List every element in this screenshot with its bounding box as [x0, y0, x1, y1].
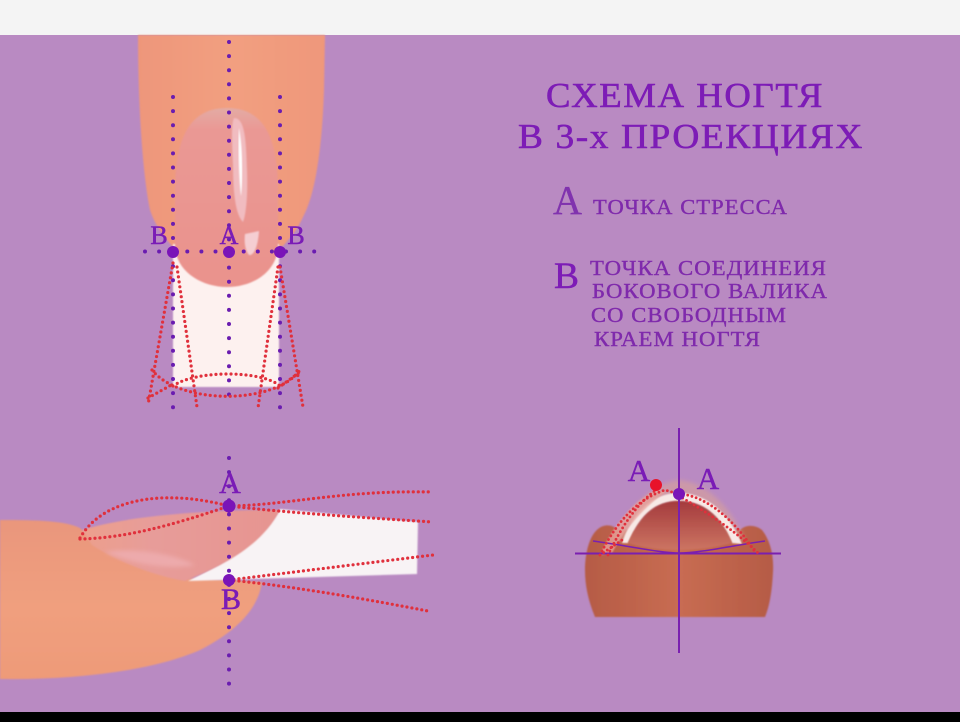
stress points: [167, 246, 286, 258]
legend: point A: ТОЧКА СТРЕССА: [593, 195, 788, 219]
finger from above: [138, 35, 325, 246]
finger under the nail: [628, 501, 732, 550]
nail highlight: [232, 118, 247, 222]
white free edge side: [188, 509, 418, 581]
top white band: [0, 0, 960, 35]
legend: point B: В: [554, 256, 579, 297]
legend: point B: [554, 256, 828, 351]
title: В 3-х ПРОЕКЦИЯХ: [518, 117, 864, 156]
finger from the side: [0, 520, 262, 679]
purple dotted guide lines: [145, 42, 316, 408]
red dotted curves: [80, 492, 433, 611]
points A and B: [222, 500, 236, 586]
fingertip body: [585, 525, 773, 617]
red dotted shape lines: [148, 263, 303, 408]
label A right: А: [697, 461, 720, 496]
pink band on the left side: [600, 490, 666, 555]
white nail arch: [622, 493, 742, 544]
panel: top view of nail: [138, 35, 325, 408]
nail lower glare: [245, 231, 259, 255]
point labels: А: [220, 221, 239, 250]
legend: point B: СО СВОБОДНЫМ: [591, 303, 787, 327]
nail glare streak: [239, 128, 242, 196]
title: СХЕМА НОГТЯ: [546, 76, 824, 115]
point labels: В: [150, 221, 168, 250]
legend: point B: КРАЕМ НОГТЯ: [594, 327, 761, 351]
nail plate side: [82, 510, 280, 581]
point labels: [150, 221, 305, 250]
purple guide line: [227, 458, 231, 685]
legend: point B: ТОЧКА СОЕДИНЕИЯ: [590, 256, 827, 280]
label A: А: [219, 467, 241, 500]
nail plate: [175, 108, 278, 287]
purple axis lines: [575, 428, 781, 653]
nail glow: [615, 480, 745, 540]
legend: point B: БОКОВОГО ВАЛИКА: [592, 279, 828, 303]
panel: side view of nail: [0, 458, 433, 685]
legend: point A: А: [553, 177, 582, 223]
point labels: В: [287, 221, 305, 250]
label B: В: [221, 583, 241, 616]
label A left: А: [628, 453, 651, 488]
bottom black band: [0, 712, 960, 722]
nail side highlight: [105, 551, 195, 567]
purple point: [673, 488, 685, 500]
panel: front view of nail: [575, 428, 781, 653]
white free edge: [173, 244, 279, 387]
red dotted curves: [600, 490, 758, 555]
legend: point A: [553, 177, 788, 223]
red point: [650, 479, 662, 491]
title: [518, 76, 864, 156]
